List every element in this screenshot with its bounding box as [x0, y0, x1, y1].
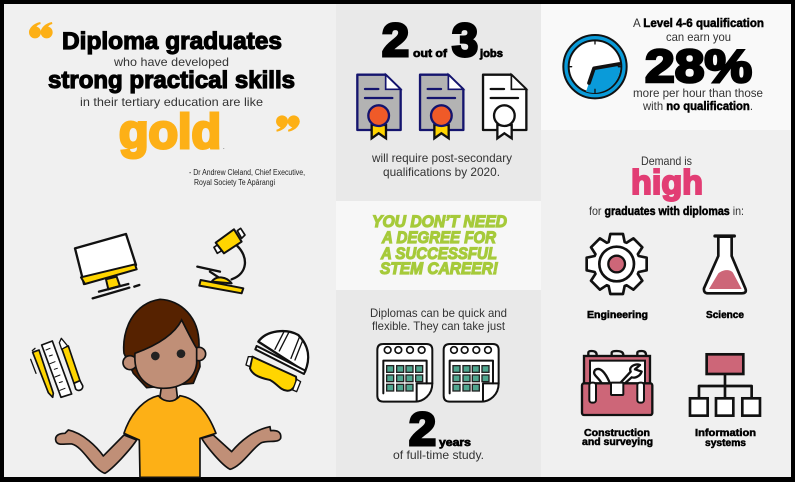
- character hair: [124, 299, 200, 388]
- duration intro text: [370, 306, 507, 333]
- banner text: A DEGREE FOR: [381, 229, 496, 247]
- demand heading: for graduates with diplomas in:: [589, 204, 744, 218]
- right quote mark: [276, 115, 300, 132]
- panel: earnings: [541, 4, 791, 130]
- earnings text: with no qualification.: [642, 99, 753, 113]
- earnings text: A Level 4-6 qualification: [633, 16, 764, 30]
- jobs caption: qualifications by 2020.: [383, 165, 500, 179]
- earnings text: more per hour than those: [633, 86, 763, 100]
- earnings text: can earn you: [666, 30, 731, 44]
- quote heading: strong practical skills: [48, 67, 295, 94]
- icon: microscope: [197, 228, 245, 293]
- banner text: [372, 213, 507, 278]
- banner text: A SUCCESSFUL: [380, 245, 497, 263]
- demand heading: high: [631, 164, 703, 202]
- attribution: - Dr Andrew Cleland, Chief Executive,: [189, 168, 305, 177]
- icon: toolbox: [582, 351, 652, 415]
- heading: 2 out of 3 jobs: [382, 14, 503, 66]
- icon: clock: [563, 35, 627, 98]
- field labels: Information: [695, 428, 756, 439]
- field labels: [582, 310, 756, 449]
- icon: filled certificate one: [357, 75, 401, 138]
- heading: 2 out of 3 jobs: out of: [413, 48, 447, 60]
- attribution: Royal Society Te Apārangi: [194, 178, 275, 187]
- heading: 2 out of 3 jobs: 3: [452, 14, 478, 66]
- banner text: STEM CAREER!: [380, 260, 498, 278]
- field labels: systems: [705, 438, 746, 449]
- icon: calendar one: [377, 344, 432, 402]
- character: shrugging person: [56, 299, 281, 477]
- earnings text: 28%: [645, 40, 752, 92]
- heading: 2 out of 3 jobs: 2: [382, 14, 409, 66]
- duration intro text: Diplomas can be quick and: [370, 306, 507, 320]
- jobs caption: will require post-secondary: [371, 151, 512, 165]
- field labels: Science: [706, 310, 744, 321]
- statistic: 2 years: 2: [409, 403, 436, 455]
- character face: [123, 320, 206, 388]
- panel: STEM career banner: [336, 201, 541, 290]
- statistic: 2 years: years: [439, 437, 471, 449]
- field labels: and surveying: [582, 437, 653, 448]
- quote heading: .: [223, 145, 225, 151]
- quote heading: gold: [119, 106, 221, 159]
- left quote mark: [29, 22, 53, 38]
- quote heading: [48, 28, 295, 159]
- panel: study duration: [336, 290, 541, 477]
- attribution: [189, 168, 305, 187]
- duration intro text: flexible. They can take just: [372, 319, 506, 333]
- icon: computer monitor: [75, 234, 139, 298]
- character shirt: [124, 396, 216, 477]
- quote heading: who have developed: [113, 55, 229, 69]
- icon: gear: [587, 234, 647, 294]
- demand heading: [589, 154, 744, 218]
- earnings text: [633, 16, 764, 113]
- icon: flask: [704, 236, 746, 293]
- statistic: 2 years: of full-time study.: [393, 448, 484, 462]
- jobs caption: [371, 151, 512, 179]
- quote heading: Diploma graduates: [62, 28, 282, 55]
- panel: quote and character: [4, 4, 336, 477]
- icon: calendar two: [444, 344, 499, 402]
- statistic: 2 years: [393, 403, 484, 462]
- field labels: Construction: [584, 428, 650, 439]
- character arms: [56, 427, 281, 473]
- icon: empty certificate: [483, 75, 526, 138]
- field labels: Engineering: [587, 310, 648, 321]
- character neck: [160, 385, 177, 401]
- quote heading: in their tertiary education are like: [80, 95, 263, 109]
- icon: ruler and pencils: [31, 338, 83, 397]
- icon: organisation chart: [690, 354, 760, 416]
- icon: hard hat and goggles: [246, 331, 308, 392]
- demand heading: Demand is: [641, 154, 692, 168]
- panel: jobs statistic: [336, 4, 541, 201]
- banner text: YOU DON’T NEED: [372, 213, 507, 231]
- heading: 2 out of 3 jobs: jobs: [479, 48, 503, 60]
- icon: filled certificate two: [420, 75, 463, 138]
- panel: demand: [541, 130, 791, 477]
